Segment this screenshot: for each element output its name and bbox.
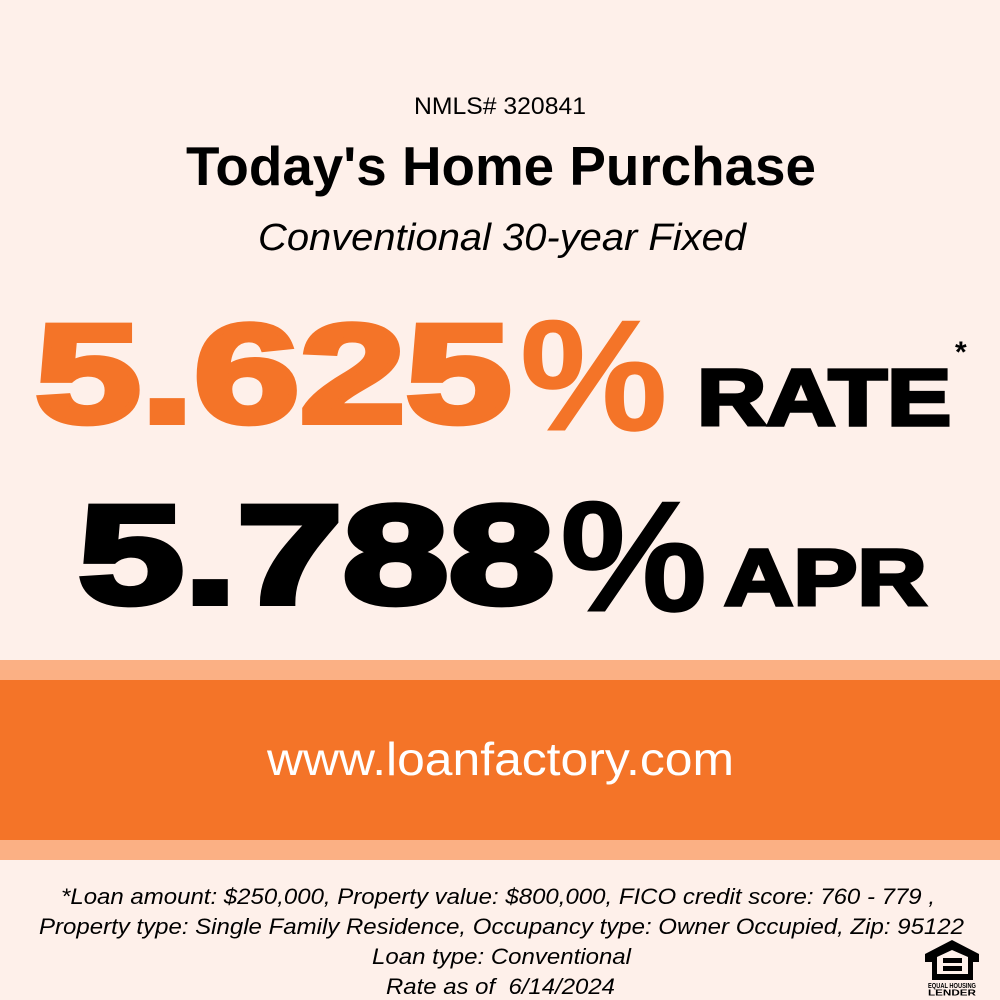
APR value: 5.788 [78, 477, 554, 633]
website banner [0, 660, 1000, 860]
icon: equal housing lender [925, 940, 979, 998]
asterisk: * [955, 336, 967, 369]
title: Today's Home Purchase [186, 135, 816, 197]
rate value: 5.625 [35, 296, 511, 452]
NMLS number: NMLS# 320841 [414, 93, 586, 120]
website banner: www.loanfactory.com [266, 733, 734, 785]
icon: equal housing lender: EQUAL HOUSING [928, 983, 976, 990]
disclaimer [39, 884, 964, 999]
APR label: APR [724, 533, 927, 622]
disclaimer: Rate as of 6/14/2024 [386, 974, 615, 999]
disclaimer: Property type: Single Family Residence, Occupancy type: Owner Occupied, Zip: 95122 [39, 914, 964, 939]
disclaimer: Loan type: Conventional [372, 944, 632, 969]
APR value: % [560, 469, 708, 645]
rate value: % [520, 288, 668, 464]
disclaimer: *Loan amount: $250,000, Property value: $800,000, FICO credit score: 760 - 779 , [61, 884, 935, 909]
rate value [35, 288, 668, 464]
icon: equal housing lender: LENDER [928, 988, 976, 998]
subtitle: Conventional 30-year Fixed [258, 217, 748, 259]
rate label: RATE [697, 353, 951, 442]
APR value [78, 469, 708, 645]
